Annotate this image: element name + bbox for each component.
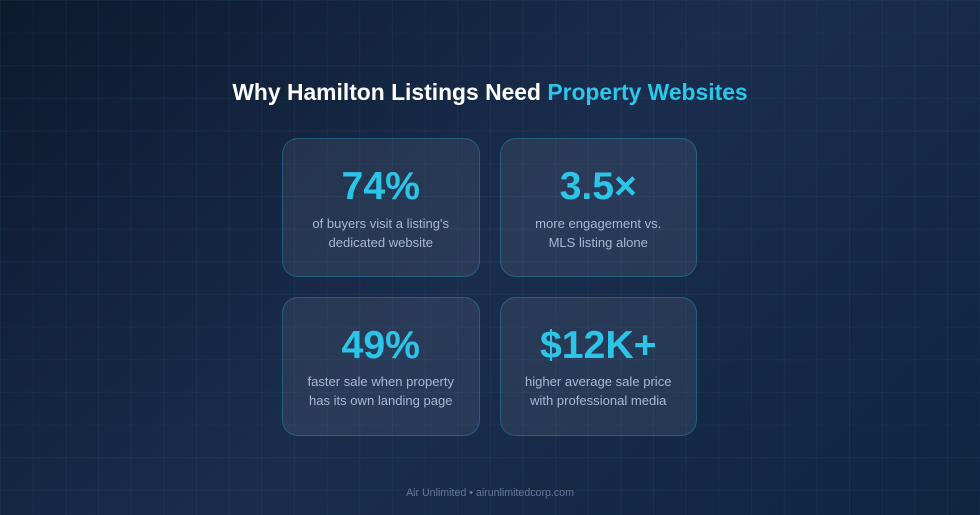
panel: 3.5x stat [500,138,697,277]
description: 49% stat: faster sale when property [308,374,454,389]
description: 74% stat: dedicated website [329,235,433,250]
description: 49% stat: has its own landing page [309,393,453,408]
description: $12K+ stat: with professional media [530,393,666,408]
stat: $12K+: $12K+ [540,324,657,367]
description: 74% stat: of buyers visit a listing's [312,216,449,231]
footer: Air Unlimited • airunlimitedcorp.com [406,487,574,499]
description: 3.5x stat: MLS listing alone [549,235,648,250]
panel: $12K+ stat [500,297,697,436]
panel: 74% stat [282,138,480,277]
stat: 49%: 49% [342,324,420,367]
description: 74% stat [312,216,449,250]
stat: 3.5x: 3.5× [560,165,637,208]
description: $12K+ stat [525,374,672,408]
panel: 49% stat [282,297,480,436]
description: $12K+ stat: higher average sale price [525,374,672,389]
stat: 74%: 74% [342,165,420,208]
description: 3.5x stat: more engagement vs. [535,216,661,231]
title: Why Hamilton Listings Need Property Websites [232,79,748,105]
description: 3.5x stat [535,216,661,250]
description: 49% stat [308,374,454,408]
